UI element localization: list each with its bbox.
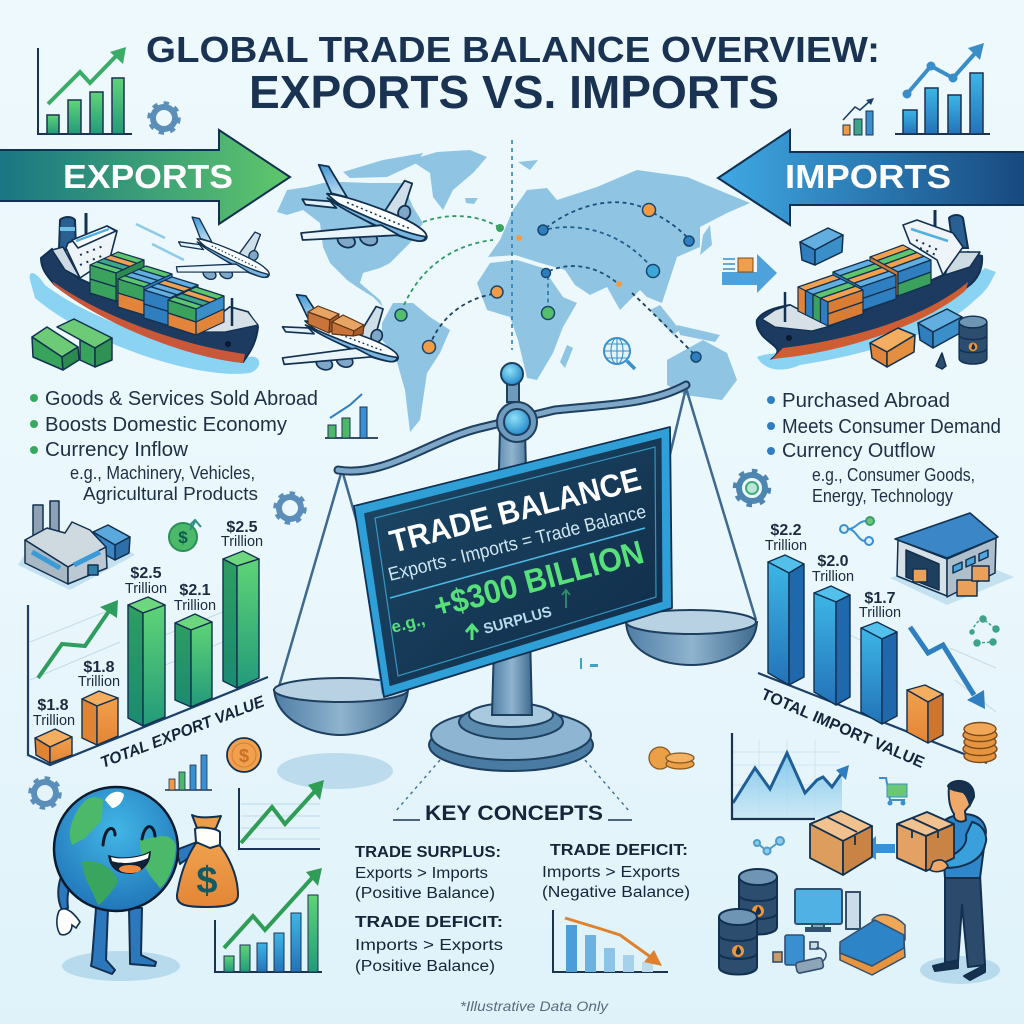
money bag: $ <box>196 860 218 902</box>
key concept: trade surplus <box>355 844 501 902</box>
icon: warehouse <box>890 513 1014 605</box>
key concept: trade deficit left: (Positive Balance) <box>355 958 495 975</box>
dashed connectors to key concepts <box>395 760 630 812</box>
exports bullet list <box>30 388 318 504</box>
imports bullet list: Purchased Abroad <box>782 390 950 412</box>
export axis label: TOTAL EXPORT VALUE <box>98 693 268 772</box>
icon: left gear <box>276 494 304 522</box>
import value labels: Trillion <box>765 538 807 554</box>
icon: phone and electronics <box>773 935 826 974</box>
shadow ellipse under scale left <box>277 753 393 789</box>
key concept: trade deficit left <box>355 914 503 975</box>
arrow: imports banner: IMPORTS <box>785 158 951 195</box>
scale base <box>429 703 593 771</box>
icon: coins beside base <box>649 747 694 769</box>
imports bullet list <box>767 390 1001 506</box>
icon: gold coin: $ <box>239 746 249 766</box>
icon: folded clothing stack <box>840 915 905 975</box>
bar: 1.7 trillion <box>861 622 897 724</box>
exports bullet list: e.g., Machinery, Vehicles, <box>70 463 255 483</box>
icon: blue container <box>800 228 843 265</box>
imports bullet list: Meets Consumer Demand <box>782 416 1001 438</box>
icon: network nodes <box>840 517 874 545</box>
box carried <box>897 812 954 871</box>
import value labels: $1.7 <box>864 590 896 607</box>
person arm <box>943 822 986 868</box>
icon: top-right growth chart <box>895 43 990 134</box>
import containers group one <box>798 275 863 326</box>
icon: dollar coin with arrow: $ <box>178 528 188 547</box>
sign surplus label: SURPLUS <box>482 603 554 638</box>
key concept: trade surplus: Exports > Imports <box>355 865 488 882</box>
key concept: trade deficit right <box>542 842 690 901</box>
sign formula: Exports - Imports = Trade Balance <box>386 501 648 586</box>
cargo crates <box>308 306 364 336</box>
title: EXPORTS VS. IMPORTS <box>249 66 779 118</box>
export value labels: Trillion <box>221 534 263 550</box>
icon: dollar coin with arrow <box>169 520 201 551</box>
icon: magnifier over globe <box>604 338 635 369</box>
person head and hair <box>948 781 974 822</box>
icon: lower-left gear <box>30 778 60 808</box>
sign surplus value: +$300 BILLION <box>429 533 647 625</box>
icon: shopping cart <box>879 778 907 806</box>
import value labels: Trillion <box>859 605 901 621</box>
decline chart <box>553 910 668 972</box>
scale top knob <box>501 363 523 402</box>
export value labels: Trillion <box>174 598 216 614</box>
bar: 2.5 trillion tallest <box>223 551 259 688</box>
line chart: green growth <box>239 780 324 849</box>
export value labels: Trillion <box>33 713 75 729</box>
globe hand <box>57 909 80 935</box>
bar: 1.8 trillion tall <box>82 691 118 745</box>
imports bullet list: e.g., Consumer Goods, <box>812 465 975 485</box>
bar: 2.5 trillion <box>128 597 165 726</box>
icon: parcel with arrow <box>722 254 777 293</box>
icon: oil barrels <box>719 869 777 974</box>
icon: gold coin <box>227 738 261 772</box>
arrow: import decline trend <box>910 627 985 709</box>
arrow between boxes <box>862 836 895 860</box>
right pan <box>626 610 757 665</box>
dashed centre divider <box>511 140 513 350</box>
title <box>146 29 880 118</box>
trade balance sign <box>354 427 672 697</box>
containers group two <box>118 266 172 315</box>
key concept: trade deficit left: Imports > Exports <box>355 937 503 954</box>
icon: desktop computer <box>795 889 860 931</box>
key concept: trade deficit left: TRADE DEFICIT: <box>355 914 503 931</box>
import value labels: Trillion <box>812 569 854 585</box>
scale strings right <box>630 388 756 620</box>
icon: small bar chart <box>165 755 212 790</box>
containers group one <box>90 252 144 301</box>
key concept: trade surplus: (Positive Balance) <box>355 885 495 902</box>
key concept: trade deficit right: (Negative Balance) <box>542 884 690 901</box>
world map <box>277 150 750 432</box>
key concept: trade deficit right: TRADE DEFICIT: <box>550 842 688 859</box>
bar chart: total export value <box>28 519 268 772</box>
icon: airplane near export ship <box>167 205 283 307</box>
export value labels: Trillion <box>78 674 120 690</box>
icon: small network right <box>970 616 999 646</box>
arrow: exports banner <box>0 130 290 224</box>
key concept: trade deficit right: Imports > Exports <box>542 864 680 881</box>
left pan <box>274 678 408 735</box>
illustration: import cargo ship <box>757 210 996 370</box>
icon: small chart top right <box>843 98 874 135</box>
import axis label: TOTAL IMPORT VALUE <box>758 686 927 772</box>
scale post <box>492 430 532 715</box>
import containers group two <box>833 260 896 311</box>
sign heading: TRADE BALANCE <box>386 461 645 560</box>
icon: network nodes lower <box>754 837 784 854</box>
ship bridge <box>52 226 117 278</box>
icon: small teal dashes <box>580 658 598 669</box>
import containers group three <box>870 245 931 296</box>
arrow: exports banner: EXPORTS <box>63 158 233 195</box>
money bag <box>177 815 238 907</box>
bar: 2.0 trillion <box>814 586 850 705</box>
illustration: smiling globe with money bag <box>54 787 238 981</box>
containers group three <box>144 277 198 326</box>
sign example prefix: e.g., <box>389 610 427 637</box>
bar and trend chart <box>215 868 322 972</box>
person legs <box>933 875 985 980</box>
person hand <box>930 860 948 872</box>
imports bullet list: Energy, Technology <box>812 486 953 506</box>
globe body <box>54 787 178 911</box>
bar chart: total import value <box>758 522 997 772</box>
icon: large airplane over map <box>289 149 443 281</box>
arrow: imports banner <box>718 130 1024 225</box>
import value labels <box>765 522 901 621</box>
icon: coin stack <box>963 722 997 762</box>
key concept: trade surplus: TRADE SURPLUS: <box>355 844 501 861</box>
exports bullet list: Agricultural Products <box>83 484 258 504</box>
bar: 2.1 trillion <box>175 614 212 707</box>
balance scale <box>274 363 757 771</box>
person torso <box>943 814 986 878</box>
import ship bridge <box>903 220 980 275</box>
icon: factory <box>18 501 135 590</box>
export value labels: $2.5 <box>226 519 258 536</box>
icon: cargo airplane <box>271 280 412 399</box>
area chart: volatile imports <box>732 733 849 819</box>
exports bullet list: Goods & Services Sold Abroad <box>45 388 318 410</box>
bar: 2.2 trillion <box>768 555 804 685</box>
icon: green containers <box>32 319 112 370</box>
sign divider <box>390 528 645 598</box>
export value labels: $1.8 <box>83 659 115 676</box>
export value labels: Trillion <box>125 581 167 597</box>
icon: right gear <box>735 471 769 505</box>
footnote: *Illustrative Data Only <box>460 998 609 1014</box>
key concepts heading: KEY CONCEPTS <box>425 802 603 825</box>
title: GLOBAL TRADE BALANCE OVERVIEW: <box>146 29 880 70</box>
imports bullet list: Currency Outflow <box>782 440 936 462</box>
icon: top-left growth chart <box>38 47 132 134</box>
scale strings left <box>278 470 405 690</box>
exports bullet list: Currency Inflow <box>45 439 189 461</box>
icon: top-left gear <box>150 104 178 132</box>
illustration: man handing box <box>810 781 1000 984</box>
globe smile <box>103 827 155 845</box>
export value labels: $1.8 <box>37 697 69 714</box>
scale central hub <box>497 402 537 442</box>
exports bullet list: Boosts Domestic Economy <box>45 414 287 436</box>
icon: orange and blue containers, barrel <box>870 309 987 369</box>
icon: motion lines beside plane <box>136 224 184 260</box>
illustration: export cargo ship <box>30 213 259 374</box>
export value labels: $2.5 <box>130 565 162 582</box>
icon: small chart beside bullets <box>325 394 378 438</box>
bar: orange low <box>907 685 943 743</box>
export value labels <box>33 519 263 729</box>
globe legs and arms <box>58 842 199 974</box>
bar: 1.8 trillion small <box>35 729 72 763</box>
import value labels: $2.2 <box>770 522 802 539</box>
scale beam <box>338 385 686 471</box>
arrow: export trend <box>38 600 118 678</box>
containers group four <box>168 287 224 335</box>
export value labels: $2.1 <box>179 582 211 599</box>
box received <box>810 811 872 875</box>
import value labels: $2.0 <box>817 553 849 570</box>
trade route arcs and nodes <box>395 202 701 362</box>
sign surplus label <box>466 590 570 640</box>
